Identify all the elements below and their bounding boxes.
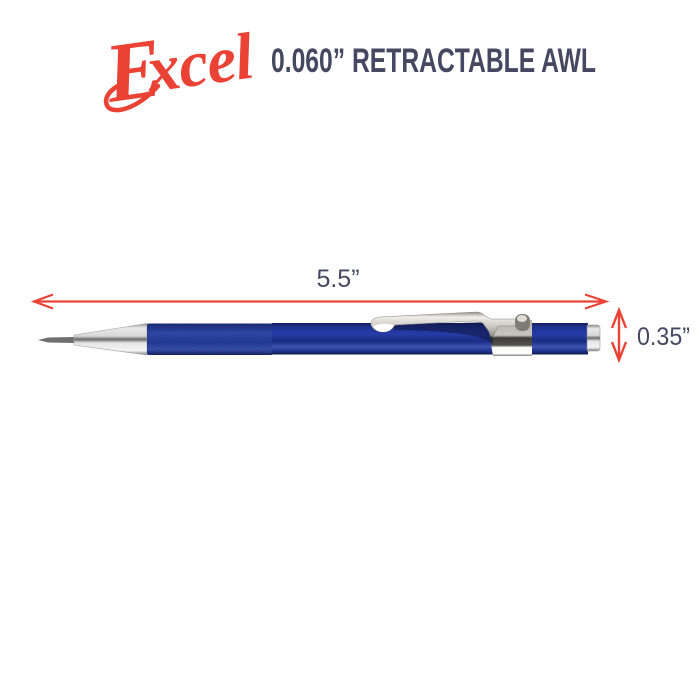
knurled grip — [147, 324, 273, 355]
arrow: diameter dimension — [612, 310, 626, 360]
awl illustration — [38, 312, 600, 356]
clip shadow — [394, 322, 493, 344]
band — [487, 320, 532, 356]
clip hole highlight — [373, 324, 394, 332]
length label: 5.5” — [316, 265, 360, 293]
end cap — [587, 325, 600, 351]
barrel — [272, 323, 588, 354]
push button — [515, 314, 530, 331]
logo: Excel script wordmark — [99, 20, 259, 121]
logo: Excel script wordmark: xcel — [141, 20, 259, 107]
chrome cone — [74, 324, 147, 355]
arrow: length dimension — [34, 294, 606, 308]
steel tip — [38, 337, 74, 343]
diameter label: 0.35” — [637, 323, 690, 351]
logo: Excel script wordmark: E — [99, 21, 168, 121]
pocket clip — [371, 312, 516, 337]
